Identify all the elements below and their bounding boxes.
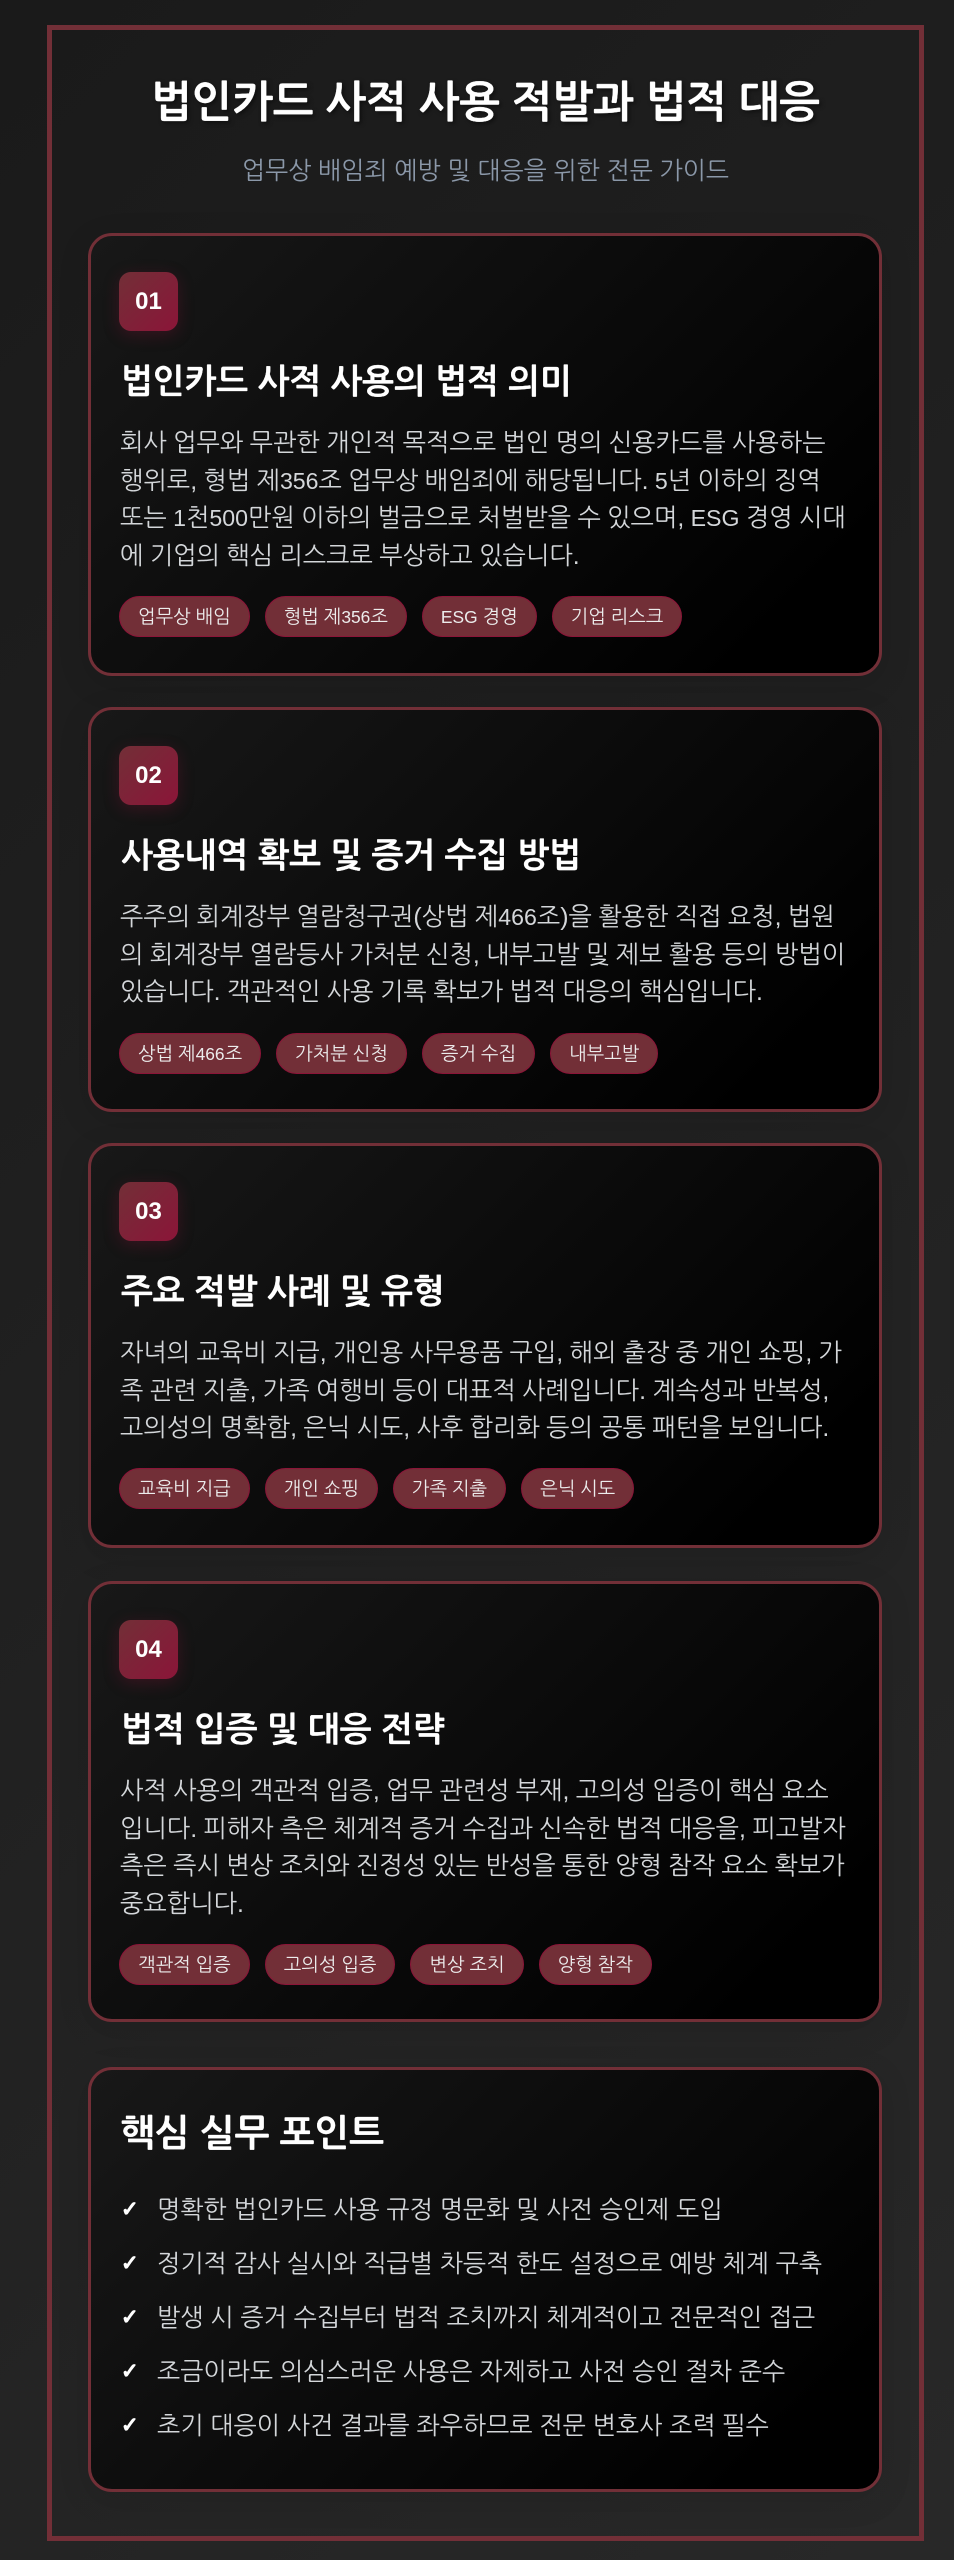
body text 01	[120, 429, 846, 570]
tags 03: 은닉 시도	[540, 1478, 615, 1499]
body text 02: 의 회계장부 열람등사 가처분 신청, 내부고발 및 제보 활용 등의 방법이	[120, 941, 845, 969]
tags 01: 업무상 배임	[138, 606, 231, 627]
point 4: 조금이라도 의심스러운 사용은 자제하고 사전 승인 절차 준수	[157, 2359, 785, 2386]
number badge 01: 01	[135, 288, 162, 315]
panel: section 02	[88, 707, 882, 1112]
title: 법인카드 사적 사용 적발과 법적 대응	[151, 79, 820, 127]
body text 04: 측은 즉시 변상 조치와 진정성 있는 반성을 통한 양형 참작 요소 확보가	[120, 1852, 845, 1880]
panel: section 01	[88, 233, 882, 676]
body text 04: 입니다. 피해자 측은 체계적 증거 수집과 신속한 법적 대응을, 피고발자	[120, 1815, 846, 1843]
heading 04: 법적 입증 및 대응 전략	[121, 1711, 444, 1749]
tags 01	[119, 596, 682, 637]
tags 04: 양형 참작	[558, 1954, 633, 1975]
heading: key points: 핵심 실무 포인트	[120, 2113, 384, 2154]
body text 04: 중요합니다.	[120, 1890, 244, 1918]
body text 01: 회사 업무와 무관한 개인적 목적으로 법인 명의 신용카드를 사용하는	[120, 429, 826, 457]
tags 02: 증거 수집	[441, 1043, 516, 1064]
tags 04	[119, 1944, 652, 1985]
body text 01: 행위로, 형법 제356조 업무상 배임죄에 해당됩니다. 5년 이하의 징역	[120, 467, 821, 495]
body text 03	[120, 1339, 842, 1442]
tags 02: 내부고발	[569, 1043, 639, 1064]
tags 03: 가족 지출	[412, 1478, 487, 1499]
heading 03: 주요 적발 사례 및 유형	[121, 1273, 444, 1311]
tags 04: 객관적 입증	[138, 1954, 231, 1975]
heading 02: 사용내역 확보 및 증거 수집 방법	[121, 837, 581, 875]
point 1: 명확한 법인카드 사용 규정 명문화 및 사전 승인제 도입	[157, 2197, 722, 2224]
subtitle: 업무상 배임죄 예방 및 대응을 위한 전문 가이드	[242, 158, 729, 185]
tags 02	[119, 1033, 658, 1074]
tags 01: 기업 리스크	[571, 606, 663, 627]
panel: key practical points	[88, 2067, 882, 2492]
point 2: ✓	[121, 2251, 139, 2275]
point 3: 발생 시 증거 수집부터 법적 조치까지 체계적이고 전문적인 접근	[157, 2305, 815, 2332]
body text 04	[120, 1777, 846, 1918]
point 5: 초기 대응이 사건 결과를 좌우하므로 전문 변호사 조력 필수	[157, 2413, 769, 2440]
tags 01: ESG 경영	[441, 606, 518, 627]
body text 04: 사적 사용의 객관적 입증, 업무 관련성 부재, 고의성 입증이 핵심 요소	[120, 1777, 829, 1805]
tags 03	[119, 1468, 634, 1509]
number badge 02	[119, 746, 178, 805]
tags 03: 개인 쇼핑	[284, 1478, 359, 1499]
point 3: ✓	[121, 2305, 139, 2329]
body text 03: 족 관련 지출, 가족 여행비 등이 대표적 사례입니다. 계속성과 반복성,	[120, 1377, 829, 1405]
body text 02: 있습니다. 객관적인 사용 기록 확보가 법적 대응의 핵심입니다.	[120, 978, 763, 1006]
body text 03: 고의성의 명확함, 은닉 시도, 사후 합리화 등의 공통 패턴을 보입니다.	[120, 1414, 829, 1442]
number badge 03	[119, 1182, 178, 1241]
tags 03: 교육비 지급	[138, 1478, 231, 1499]
tags 02: 가처분 신청	[295, 1043, 388, 1064]
number badge 03: 03	[135, 1198, 162, 1225]
body text 03: 자녀의 교육비 지급, 개인용 사무용품 구입, 해외 출장 중 개인 쇼핑, 가	[120, 1339, 842, 1367]
tags 04: 고의성 입증	[284, 1954, 376, 1975]
panel: section 03	[88, 1143, 882, 1548]
tags 04: 변상 조치	[429, 1954, 505, 1975]
point 1: ✓	[121, 2197, 139, 2221]
tags 02: 상법 제466조	[138, 1043, 242, 1064]
number badge 04: 04	[135, 1636, 162, 1663]
body text 01: 에 기업의 핵심 리스크로 부상하고 있습니다.	[120, 542, 580, 570]
body text 02: 주주의 회계장부 열람청구권(상법 제466조)을 활용한 직접 요청, 법원	[120, 903, 835, 931]
number badge 01	[119, 272, 178, 331]
panel: section 04	[88, 1581, 882, 2022]
body text 02	[120, 903, 845, 1006]
tags 01: 형법 제356조	[284, 606, 388, 627]
number badge 04	[119, 1620, 178, 1679]
body text 01: 또는 1천500만원 이하의 벌금으로 처벌받을 수 있으며, ESG 경영 시대	[120, 504, 846, 532]
point 5: ✓	[121, 2413, 139, 2437]
point 4: ✓	[121, 2359, 139, 2383]
point 2: 정기적 감사 실시와 직급별 차등적 한도 설정으로 예방 체계 구축	[157, 2251, 822, 2278]
heading 01: 법인카드 사적 사용의 법적 의미	[121, 363, 572, 401]
number badge 02: 02	[135, 762, 162, 789]
